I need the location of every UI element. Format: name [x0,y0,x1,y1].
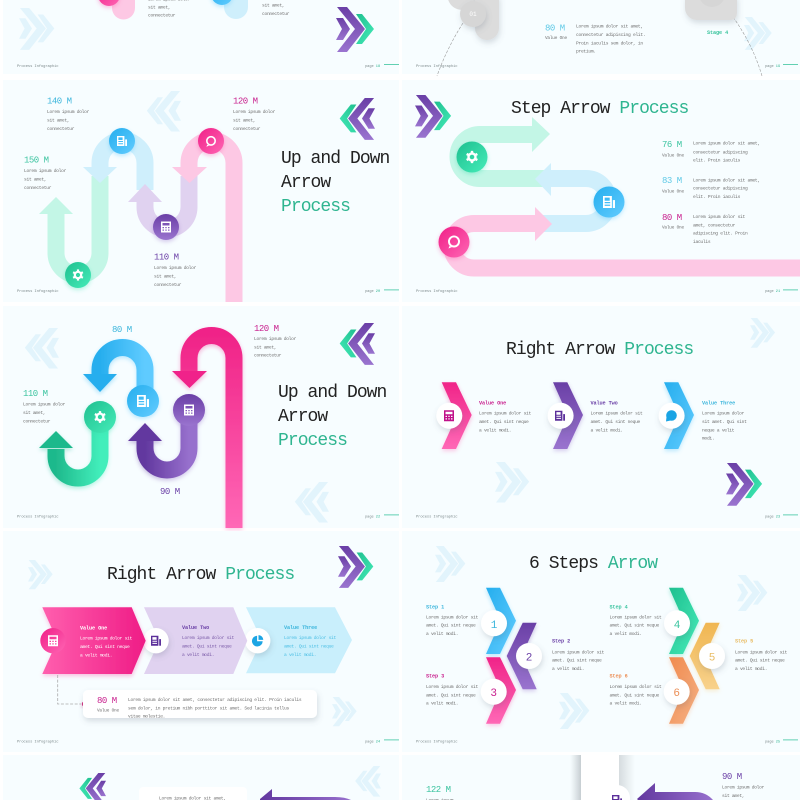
footer: Process Infographic [416,740,457,744]
step 2: Lorem ipsum dolor sit [552,649,605,655]
stat: 140 M [47,96,90,132]
step 5: Step 5 [735,639,753,645]
step 3: 3 [490,688,497,700]
step: value three: sit amet. Qui sint [702,419,747,425]
footer: page 22 [365,516,380,520]
callout card: vitae molestie. [128,714,165,720]
step: value three: neque a velit [702,427,735,433]
step 1: amet. Qui sint neque [426,622,476,628]
stat: 110 M: connectetur [154,282,182,288]
footer: Process Infographic [416,289,457,294]
gray arrow left with 01 [447,0,499,40]
title: Process [278,431,347,451]
label: Stage 4: Stage 4 [707,30,728,36]
stat: 122 M [426,785,454,800]
arrow: value two: Value Two [182,625,209,631]
stat: 90 M: 90 M [160,487,180,497]
footer: page 21 [765,290,780,294]
title: Step Arrow Process [511,99,688,119]
node: pink bubble [438,226,470,258]
footer: page 19 [765,65,780,69]
stat: 110 M: Lorem ipsum dolor [154,265,197,271]
arrow: value one: amet. Qui sint neque [80,644,130,650]
icon: pale chevrons lower [332,697,357,726]
stat: 120 M: Lorem ipsum dolor [233,109,276,115]
step 2: 2 [526,652,532,664]
step: value two: Value Two [590,400,618,406]
footer: page 23 [765,516,780,520]
panel: slide 23 right arrow process [402,306,800,528]
step 3: Lorem ipsum dolor sit [426,684,479,690]
step 5 [690,623,788,689]
stat: 120 M: connectetur [233,126,261,132]
stat: 110 M [23,389,66,424]
node: pink bubble [198,128,224,154]
text: body: Lorem ipsum dolor sit amet, [576,24,643,30]
step: value three [659,382,747,449]
step 6: a velit modi. [610,700,642,706]
icon: coloured chevrons [336,7,374,52]
arrow: value two: amet. Qui sint neque [182,644,232,650]
stat: 76 M: 76 M [662,140,682,150]
stat: 76 M: Value One [662,153,684,158]
callout card: Value One [97,708,119,714]
stat: 80 M: amet, consectetur [693,222,736,228]
footer: page 24 [365,740,380,744]
step 4: a velit modi. [610,631,642,637]
connector dot [82,702,87,706]
stat: 83 M: 83 M [662,176,682,186]
step 6: 6 [673,688,680,700]
stat: 90 M: Lorem ipsum dolor [722,784,765,790]
text: blue note: sit amet, [262,3,284,9]
arrow: value three: Value Three [284,625,317,631]
footer [17,289,399,294]
callout card [83,690,317,720]
panel: slide 24 right arrow process banner [3,531,399,752]
stat: 80 M [662,213,748,245]
step 6: Lorem ipsum dolor sit [610,684,662,690]
stat: 140 M: connectetur [47,126,75,132]
step 2 [507,623,605,689]
panel: slide 21 step arrow process [402,80,800,302]
icon: coloured chevrons [415,95,451,138]
icon: pale chevrons top left [435,546,465,582]
node: green gear [84,401,116,433]
title: Process [281,197,350,217]
step 4: Lorem ipsum dolor sit [610,614,662,620]
panel: slide 25 six steps arrow [402,531,800,752]
node: blue doc [594,186,624,218]
icon: pale chevrons top [28,560,53,589]
green pale arrow [39,176,100,275]
step 4: Step 4 [610,604,628,610]
step 2: Step 2 [552,639,570,645]
footer [17,514,399,520]
icon: coloured chevrons [340,98,375,140]
icon: pale chevrons lower [295,482,329,522]
blue pale arrow [530,163,608,224]
step 2: a velit modi. [552,666,584,672]
pink solid arrow [172,336,234,528]
footer: Process Infographic [416,64,457,69]
icon: coloured chevrons [338,546,373,588]
step: value one: amet. Qui sint neque [479,419,529,425]
node: purple calc [173,394,205,426]
pink arrow end and circle [98,0,135,20]
step 6: amet. Qui sint neque [610,692,660,698]
text: pink note: connectetur [148,13,176,19]
step: value two [548,382,643,449]
step 5: amet. Qui sint neque [735,658,785,664]
footer: Process Infographic [17,740,58,744]
panel: slide 19 partial [402,0,800,76]
stat: 110 M: connectetur [23,418,51,424]
stat: 150 M: 150 M [24,156,49,166]
footer [416,740,798,744]
stat: 83 M [662,176,760,200]
pink pale arrow [172,141,234,302]
footer [416,514,798,520]
stat: 140 M: 140 M [47,96,72,106]
purple arrow [637,783,713,800]
stat: 80 M: adipiscing elit. Proin [693,230,748,236]
title: Up and Down [278,383,387,403]
icon: pale chevrons [25,328,59,368]
stat: 110 M: 110 M [154,252,179,262]
step 6 [610,657,699,724]
panel: slide 18 partial [3,0,399,74]
step 3: amet. Qui sint neque [426,692,476,698]
step 1 [426,588,516,654]
title: Up and Down [281,149,390,169]
step 3: Step 3 [426,674,444,680]
stat: 80 M: 80 M [662,213,682,223]
arrow: value two: a velit modi. [182,652,214,658]
stat: 110 M: sit amet, [154,274,176,280]
stat: 80 M: 80 M [545,24,565,34]
stat: 140 M: Lorem ipsum dolor [47,109,90,115]
connector dashed [58,675,81,704]
step 5: a velit modi. [735,666,767,672]
stat: 120 M: sit amet, [254,344,276,350]
stat: 83 M: elit. Proin iaculis [693,194,741,200]
icon: pale chevrons lower [559,693,589,729]
step 4 [610,588,699,654]
stat: 90 M [722,772,765,799]
text: body: Proin iaculis sem dolor, in [576,40,643,46]
text: body: connectetur adipiscing elit. [576,32,645,38]
green solid arrow [39,417,100,478]
footer: page 25 [765,740,780,744]
stat: 120 M: connectetur [254,352,282,358]
step 6: Step 6 [610,674,628,680]
step: value three: Value Three [702,400,735,406]
title: Right Arrow Process [107,565,294,585]
arrow: value three: a velit modi. [284,652,316,658]
stat: 110 M: 110 M [23,389,48,399]
gray arrow left with 01: 01 [469,11,477,18]
title: Arrow [281,173,331,193]
node: blue doc [109,128,135,154]
shadow left of band [570,755,581,800]
step 1: Step 1 [426,604,444,610]
footer [416,64,798,69]
step: value one: a velit modi. [479,427,511,433]
green pale arrow [458,117,550,178]
stat: 120 M [233,96,276,132]
footer [17,64,399,69]
blue solid arrow [83,348,145,400]
purple pale arrow [128,176,189,229]
icon: coloured chevrons [340,323,375,365]
stat: 120 M [254,324,297,358]
footer: Process Infographic [17,289,58,294]
step 1: Lorem ipsum dolor sit [426,614,479,620]
arrow: value one [40,607,146,674]
footer: page 20 [365,290,380,294]
stat: 120 M: sit amet, [233,118,255,124]
arrow: value three [245,607,352,673]
step 2: amet. Qui sint neque [552,658,602,664]
stat: 150 M: sit amet, [24,176,46,182]
step: value one [436,382,532,449]
stat: 150 M [24,156,67,191]
stat: 83 M: Value One [662,189,684,194]
stat: 80 M: 80 M [112,325,132,335]
stat: 120 M: 120 M [254,324,279,334]
purple arrow [260,789,351,800]
arrow: value one: a velit modi. [80,652,112,658]
text: body: pretium. [576,48,596,54]
step: value one: Lorem ipsum dolor sit [479,410,532,416]
arrow: value three: Lorem ipsum dolor sit [284,635,337,641]
gray arrow right [685,0,737,20]
footer: Process Infographic [17,64,58,69]
blue pale arrow [83,141,145,190]
stat: 80 M: iaculis [693,239,711,245]
step 3 [426,657,516,724]
stat: 110 M: Lorem ipsum dolor [23,402,66,408]
node: white circle with icon [604,785,630,800]
step: value three: modi. [702,436,714,442]
footer: Process Infographic [416,514,457,520]
node: purple calc [153,214,179,240]
node: blue doc [127,385,159,417]
arrow: value one: Lorem ipsum dolor sit [80,636,133,642]
text: pink note: sit amet, [148,4,170,10]
stat: 80 M: Lorem ipsum dolor sit [693,214,746,220]
icon: coloured chevrons [726,463,762,506]
callout card: Lorem ipsum dolor sit amet, consectetur adipiscing elit. Proin iaculis [128,697,302,703]
icon: pale chevrons top [750,318,775,348]
panel: slide 26 partial [3,755,399,800]
title: Arrow [278,407,328,427]
arrow: value one: Value One [80,626,107,632]
footer: Process Infographic [17,514,58,520]
stat: 110 M [154,252,197,288]
text: blue note: connectetur [262,11,290,17]
text card [139,787,247,800]
step 5: Lorem ipsum dolor sit [735,649,788,655]
step: value two: amet. Qui sint neque [590,419,641,425]
step 4: amet. Qui sint neque [610,622,660,628]
stat: 140 M: sit amet, [47,118,69,124]
footer [416,289,798,294]
stat: 76 M: consectetur adipiscing [693,149,748,155]
icon: pale chevrons [19,8,54,50]
step: value two: Lorem ipsum dolor sit [590,410,643,416]
arrow: value three: amet. Qui sint neque [284,644,334,650]
title: 6 Steps Arrow [529,554,658,574]
stat: 150 M: connectetur [24,185,52,191]
node: green gear [65,262,91,288]
stat: 120 M: 120 M [233,96,258,106]
stat: 150 M: Lorem ipsum dolor [24,168,67,174]
step: value two: a velit modi. [590,427,623,433]
footer: page 18 [365,65,380,69]
panel: slide 20 up and down arrow process [3,80,399,302]
callout card: sem dolor, in pretium nibh porttitor sit amet. Sed lacinia tellus [128,705,290,711]
stat: 76 M: Lorem ipsum dolor sit amet, [693,140,760,146]
stat: 90 M: sit amet, [722,793,744,799]
stat: 76 M [662,140,760,163]
stat: 80 M: Value One [545,36,567,41]
icon: pale chevrons lower [495,462,529,502]
node: green gear [456,142,488,172]
stat: 80 M [545,24,567,41]
step 4: 4 [674,620,681,632]
icon: pale chevrons [355,766,381,797]
icon: pale chevrons right [737,575,767,611]
icon: pale chevrons [147,91,181,132]
stat: 80 M: Value One [662,226,684,230]
step 1: a velit modi. [426,631,458,637]
step 5: 5 [709,652,715,664]
panel: slide 22 up and down arrow process vivid [3,306,399,528]
stat: 120 M: Lorem ipsum dolor [254,336,297,342]
stat: 83 M: Lorem ipsum dolor sit amet, [693,177,760,183]
stat: 110 M: sit amet, [23,410,45,416]
stat: 90 M: 90 M [722,772,742,782]
blue arrow end and circle [211,0,248,19]
callout card: 80 M [97,696,117,706]
shadow right of band [619,755,635,800]
arrow: value two: Lorem ipsum dolor sit [182,635,235,641]
icon: coloured chevrons [79,773,106,800]
title: Right Arrow Process [506,340,693,360]
step 3: a velit modi. [426,700,458,706]
purple solid arrow [128,410,189,470]
dashed arc right [733,17,762,76]
footer [17,740,399,744]
pink pale arrow [452,207,800,268]
icon: pale chevrons [744,17,772,50]
step: value one: Value One [479,400,506,406]
dashed arc left [437,23,463,76]
stat: 122 M: 122 M [426,785,451,795]
stat: 83 M: consectetur adipiscing [693,186,748,192]
white vertical band [581,755,619,800]
step 1: 1 [491,620,498,632]
panel: slide 27 partial [402,755,800,800]
stat: 76 M: elit. Proin iaculis [693,157,741,163]
arrow: value two [143,607,247,674]
step: value three: Lorem ipsum dolor [702,410,745,416]
